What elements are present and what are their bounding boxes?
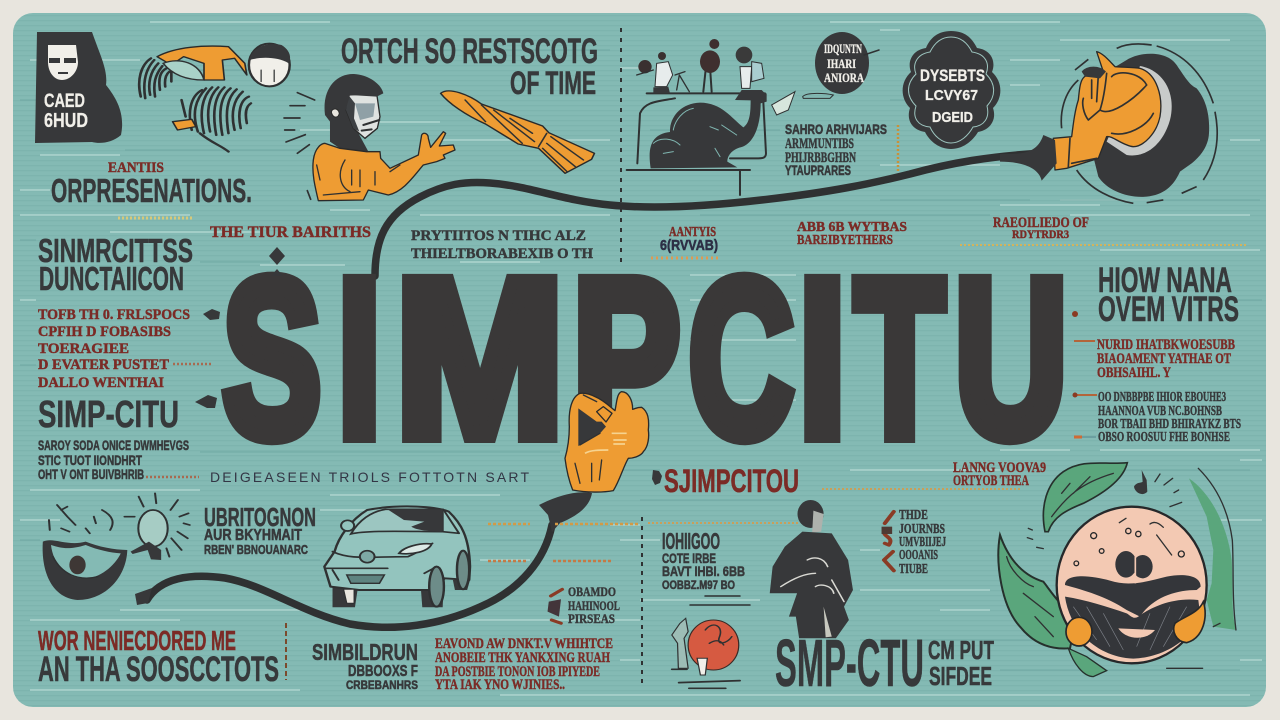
text block: red list left: TOERAGIEE [38, 341, 129, 357]
label: raeoiliedo of [960, 215, 1247, 245]
vertical divider top [620, 28, 622, 262]
illustration: orange arm [441, 91, 594, 173]
text block: red list left: CPFIH D FOBASIBS [38, 324, 171, 340]
illustration: man reaching [284, 74, 455, 201]
fruit: beard [1065, 597, 1200, 659]
label: abb 6b wytbas: ABB 6B WYTBAS [797, 220, 907, 235]
icon: face [48, 45, 78, 80]
text block: ihiigoo: BAVT IHBI. 6BB [662, 563, 745, 579]
dotted dividers centre [648, 489, 1020, 523]
text block: obamdo [568, 584, 620, 626]
text block: upper centre right: SAHRO ARHVIJARS [785, 121, 887, 137]
label: lanng vvova: LANNG VOOVA9 [953, 460, 1046, 476]
text block: centre top [411, 228, 593, 262]
illustration: tomato and figure [672, 618, 740, 688]
text block: ubritogion [204, 502, 316, 557]
label: lanng vvova: ORTYOB THEA [953, 473, 1029, 489]
cloud badge: LCVY67 [925, 87, 978, 104]
heading: orpresenations: EANTIIS [108, 160, 164, 176]
fruit: band [1065, 575, 1201, 617]
heading: bottom left: AN THA SOOSCCTOTS [38, 650, 279, 689]
icon: light bulb [124, 493, 190, 560]
heading: hiow nana [1098, 261, 1239, 329]
fruit: skin [1057, 507, 1207, 663]
text block: simbilurun: CRBEBANHRS [346, 678, 418, 692]
fruit: left orange [1066, 617, 1092, 646]
icon: helmet and scribbled figure [139, 44, 290, 152]
title: SIMPCITU: S [222, 234, 321, 484]
dotted dividers [146, 364, 640, 561]
bullets right [1072, 311, 1097, 437]
text block: right red: OBHSAIHL. Y [1097, 365, 1171, 381]
heading: orpresenations [51, 160, 252, 209]
title: SIMPCITU: M [395, 234, 564, 484]
text block: small left [38, 437, 189, 482]
title: SIMPCITU: C [689, 234, 794, 484]
icon: pointer left upper [203, 309, 220, 320]
heading: bottom left: WOR NENIECDORED ME [38, 625, 236, 656]
title: SIMPCITU: P [573, 234, 680, 484]
label: aantyis: 6(RVVAB) [660, 237, 718, 254]
text block: upper centre right: ARMMUNTIBS [785, 136, 854, 152]
heading: simmrcittss: SINMRCITTSS [38, 232, 193, 269]
text block: ihiigoo: IOHIIGOO [662, 528, 720, 554]
leaf: top [1043, 463, 1127, 532]
label: abb 6b wytbas: BAREIBYETHERS [797, 233, 893, 248]
text block: simbilurun [312, 639, 418, 692]
text block: obamdo: OBAMDO [568, 584, 616, 599]
label: abb 6b wytbas [797, 220, 907, 248]
vertical divider bottom left [285, 623, 287, 680]
text block: centre top: PRYTIITOS N TIHC ALZ [411, 228, 586, 244]
illustration: bowl [43, 505, 127, 600]
label: raeoiliedo of: RDYTRDR3 [1012, 227, 1069, 241]
text block: ubritogion: UBRITOGNON [204, 502, 316, 532]
heading: sjimpcitou [652, 463, 799, 499]
caption: centre strip: DEIGEASEEN TRIOLS FOTTOTN SART [210, 469, 529, 485]
speech bubble dark: IDQUNTN [824, 41, 862, 56]
text block: ihiigoo: COTE IRBE [662, 550, 716, 566]
text block: right red: BIAOAMENT YATHAE OT [1097, 351, 1231, 367]
text block: upper centre right [785, 121, 887, 178]
text block: thde list: OOOANIS [899, 548, 938, 563]
title: SIMPCITU: T [855, 234, 945, 484]
title: SIMPCITU: I [798, 234, 846, 484]
speech bubble dark: IHARI [827, 56, 856, 71]
text block: bottom centre red [435, 636, 613, 693]
icon: diamond above title [269, 247, 285, 276]
heading: smp-ctu: CM PUT [928, 635, 994, 665]
text block: red list left [38, 307, 190, 391]
text block: thde list: UMVBIIJEJ [899, 535, 946, 550]
icon: pointer left lower [195, 395, 217, 408]
heading: top centre [341, 32, 598, 101]
text block: red list left: D EVATER PUSTET [38, 357, 169, 373]
cloud badge [903, 31, 1000, 149]
text block: right red: NURID IHATBKWOESUBB [1097, 337, 1235, 353]
text block: thde list: THDE [899, 508, 928, 523]
title: SIMPCITU: I [338, 234, 381, 484]
fruit: right orange [1174, 602, 1205, 643]
text block: thde list: TIUBE [899, 562, 928, 577]
text block: simbilurun: SIMBILDRUN [312, 639, 418, 665]
text block: ubritogion: AUR BKYHMAIT [204, 527, 302, 544]
dotted divider left [118, 216, 193, 220]
icon: red squiggle small [548, 589, 562, 623]
text block: simbilurun: DBBOOXS F [348, 663, 418, 680]
text block: obamdo: HAHINOOL [568, 598, 620, 613]
text block: upper centre right: YTAUPRARES [785, 162, 851, 178]
red subheading: THE TIUR BAIRITHS [210, 224, 371, 241]
heading: top centre: OF TIME [510, 65, 596, 101]
note mark [1134, 470, 1147, 494]
leaf: bottom [1068, 648, 1107, 677]
label: aantyis [651, 225, 718, 258]
text block: ihiigoo [662, 528, 750, 605]
text block: obamdo: PIRSEAS [568, 611, 615, 626]
text block: bottom centre red: DA POSTBIE TONON IOB IPIYEDE [435, 664, 600, 680]
badge text: CAED [44, 91, 85, 112]
icon: red squiggle list marker [882, 512, 894, 571]
text block: right red [1097, 337, 1235, 381]
title: SIMPCITU: U [954, 234, 1068, 484]
illustration: orange hand [565, 392, 649, 492]
heading: smp-ctu: SIFDEE [929, 661, 992, 691]
speech bubble dark [815, 32, 879, 94]
illustration: fist in dark cloud [1000, 44, 1217, 203]
text block: small left: STIC TUOT IIONDHRT [38, 452, 142, 468]
label: raeoiliedo of: RAEOILIEDO OF [993, 215, 1089, 231]
leaf: left [998, 535, 1077, 649]
speech bubble dark: ANIORA [824, 70, 864, 85]
text block: bottom centre red: EAVOND AW DNKT.V WHIHTCE [435, 636, 613, 652]
text block: ubritogion: RBEN' BBNOUANARC [204, 542, 308, 557]
text block: upper centre right: PHIJRBBGHBN [785, 150, 856, 166]
text block: small left: OHT V ONT BUIVBHRIB [38, 466, 144, 482]
illustration: car [324, 506, 470, 607]
label: lanng vvova [953, 460, 1046, 489]
text block: thde list [899, 508, 946, 577]
badge text [44, 91, 88, 132]
illustration: elephant and figures [627, 39, 833, 195]
text block: bottom centre red: ANOBEIE THK YANKXING RUAH [435, 650, 610, 666]
heading: simmrcittss: DUNCTAIICON [39, 260, 184, 297]
heading: simmrcittss [38, 232, 193, 297]
connector curve top [375, 153, 1045, 276]
heading: orpresenations: ORPRESENATIONS. [51, 172, 252, 209]
leaf: right [1189, 478, 1236, 630]
dotted divider orange vertical [897, 125, 899, 172]
text block: right dark [1098, 390, 1241, 445]
text block: centre top: THIELTBORABEXIB O TH [411, 246, 593, 262]
text block: bottom centre red: YTA IAK YNO WJINIES.. [435, 677, 565, 693]
text block: red list left: TOFB TH 0. FRLSPOCS [38, 307, 190, 323]
connector curve bottom [135, 492, 592, 627]
label: aantyis: AANTYIS [669, 225, 716, 240]
cloud badge: DYSEBTS [920, 66, 985, 85]
heading: bottom left [38, 625, 279, 689]
text block: thde list: JOURNBS [899, 522, 945, 537]
cloud badge: DGEID [932, 109, 973, 126]
text block: ihiigoo: OOBBZ.M97 BO [662, 578, 735, 592]
heading: smp-ctu: SMP-CTU [775, 626, 924, 701]
illustration: man in black [770, 500, 853, 638]
badge: dark profile label [35, 32, 122, 143]
heading: top centre: ORTCH SO RESTSCOTG [341, 32, 598, 71]
badge text: 6HUD [44, 110, 88, 132]
illustration: fruit face with leaves [998, 463, 1236, 677]
title: SIMPCITU [222, 234, 1068, 484]
text block: small left: SAROY SODA ONICE DWMHEVGS [38, 437, 189, 453]
heading: sjimpcitou: SJIMPCITOU [664, 463, 799, 499]
vertical divider centre bottom [641, 517, 643, 685]
text block: red list left: DALLO WENTHAI [38, 375, 164, 391]
heading: simp-citu left: SIMP-CITU [38, 394, 179, 436]
